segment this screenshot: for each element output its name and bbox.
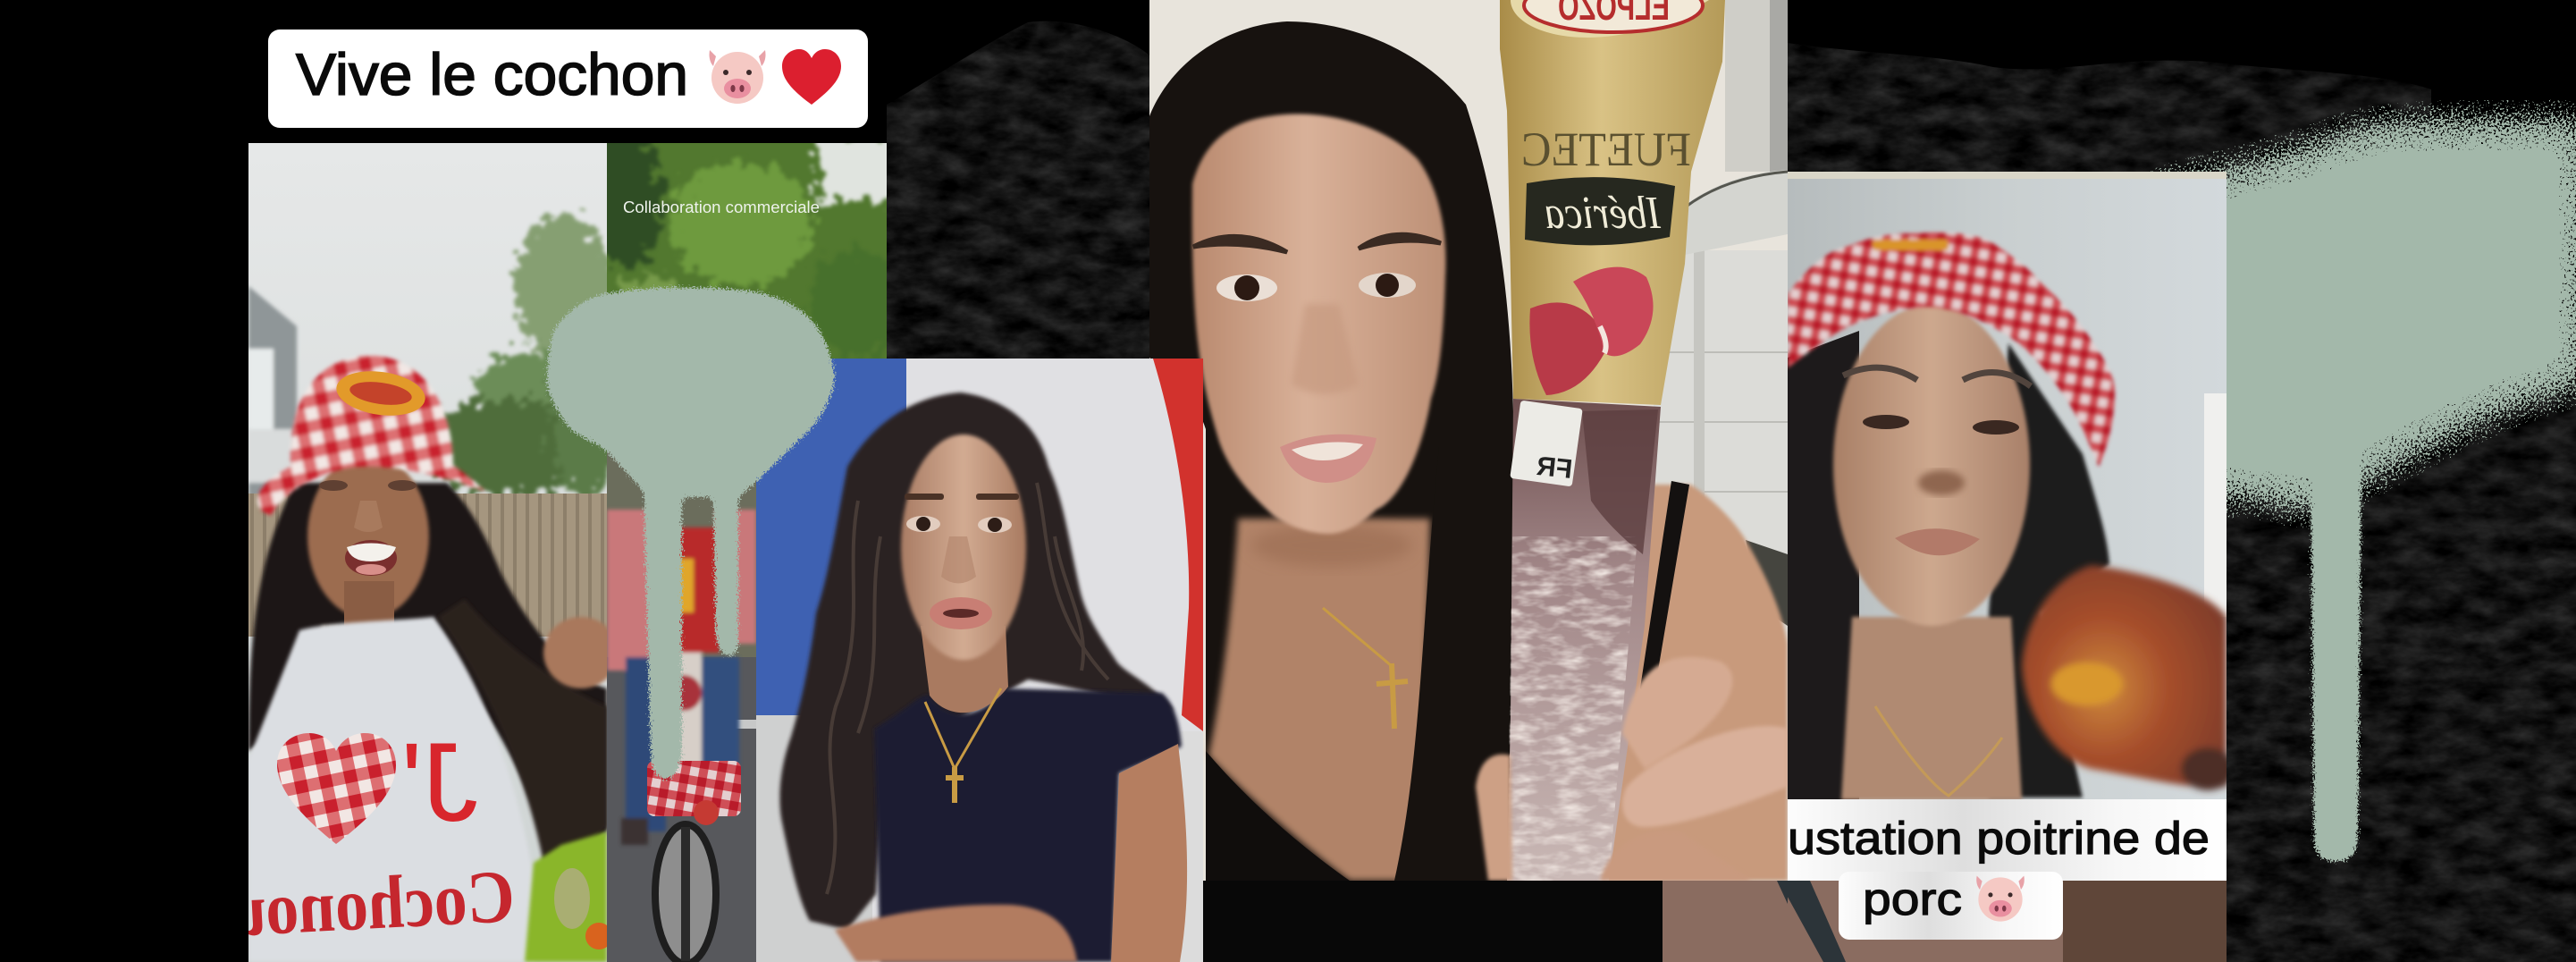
textured black wall, top centre xyxy=(887,21,1149,359)
caption band xyxy=(1788,799,2227,881)
heart logo xyxy=(277,733,396,844)
flag: red xyxy=(1153,359,1203,731)
caption line 2: porc xyxy=(1863,873,1962,924)
necklace with cross xyxy=(925,688,1001,803)
bucket hat xyxy=(1788,232,2115,467)
mirrored product name: FUETEC xyxy=(1521,122,1691,176)
face xyxy=(1833,304,2030,626)
caption line 2 box xyxy=(1839,872,2063,940)
eyes, brows, nose, lips xyxy=(1843,367,2031,555)
caption line 1: ustation poitrine de xyxy=(1788,813,2210,864)
front wheel xyxy=(655,800,719,962)
black product band xyxy=(1525,177,1675,245)
hand with fingers xyxy=(1476,657,1788,881)
label: Collaboration commerciale: Collaboration commerciale xyxy=(623,198,820,216)
under-chin shadow xyxy=(1256,526,1408,566)
icon: pig emoji xyxy=(710,50,765,104)
hair over chest xyxy=(1394,517,1435,881)
hair strands xyxy=(827,483,1108,894)
fuet sausage xyxy=(1507,399,1661,881)
arm xyxy=(1600,485,1788,881)
panel: woman in gingham hat and Cochonou t-shirt xyxy=(227,143,621,962)
bucket hat xyxy=(257,356,485,515)
hair xyxy=(779,392,1174,930)
caption lower backgrounds xyxy=(1779,881,2227,962)
necklace with cross xyxy=(1323,608,1408,729)
building xyxy=(248,286,297,501)
eyes, brows, nose, mouth xyxy=(1193,234,1441,483)
panel: cyclists on gingham bike xyxy=(607,359,756,962)
fence xyxy=(248,494,607,637)
black top xyxy=(1206,751,1350,881)
sausage label xyxy=(1510,401,1583,486)
hair xyxy=(248,483,607,881)
face xyxy=(901,435,1026,660)
panel: trees with partnership label xyxy=(590,125,907,359)
title text: Vive le cochon xyxy=(296,41,688,107)
panel: woman tasting pork belly xyxy=(1779,172,2235,962)
grilled pork belly xyxy=(2022,565,2235,790)
panel: woman holding fuet sausage xyxy=(1149,0,1788,881)
flag: blue xyxy=(756,359,906,716)
face xyxy=(307,454,429,619)
spray paint splash, centre left xyxy=(547,287,834,780)
green prop xyxy=(525,831,612,962)
panel: woman in front of French flag xyxy=(756,359,1203,962)
hair xyxy=(1149,21,1514,881)
hand xyxy=(835,905,1077,962)
face xyxy=(1192,114,1446,534)
necklace xyxy=(1875,706,2002,796)
spray paint splash, right xyxy=(2145,114,2576,862)
hand in hair xyxy=(543,617,619,688)
title pill xyxy=(268,30,868,128)
sausage label: FR xyxy=(1535,451,1574,485)
riders xyxy=(607,510,756,845)
icon: pig emoji xyxy=(1976,876,2025,922)
mouth xyxy=(345,540,397,576)
textured wall, right side xyxy=(1788,43,2576,962)
mirrored Cochonou lettering: Cochonou xyxy=(227,855,517,953)
brand logo xyxy=(1524,0,1703,32)
fuet packaging xyxy=(1500,0,1725,405)
hair over shirt xyxy=(438,599,607,881)
t-shirt xyxy=(248,617,535,962)
trees xyxy=(425,215,621,496)
slices picture xyxy=(1529,267,1654,395)
icon: red heart emoji xyxy=(782,49,841,105)
hair xyxy=(1788,331,1859,799)
ground xyxy=(756,715,872,962)
navy top xyxy=(874,688,1182,962)
kitchen wall xyxy=(1654,0,1788,881)
neck xyxy=(921,626,1008,713)
chest xyxy=(1841,617,2022,800)
strip under centre panel xyxy=(1203,881,1841,962)
chest xyxy=(1208,519,1430,881)
black product band: Ibérica xyxy=(1545,188,1662,239)
bike basket xyxy=(647,761,741,816)
arm xyxy=(1111,744,1187,962)
mirrored J' lettering: J' xyxy=(401,721,478,845)
top strap xyxy=(1640,481,1689,697)
eyes, brows, nose, mouth xyxy=(905,494,1019,629)
